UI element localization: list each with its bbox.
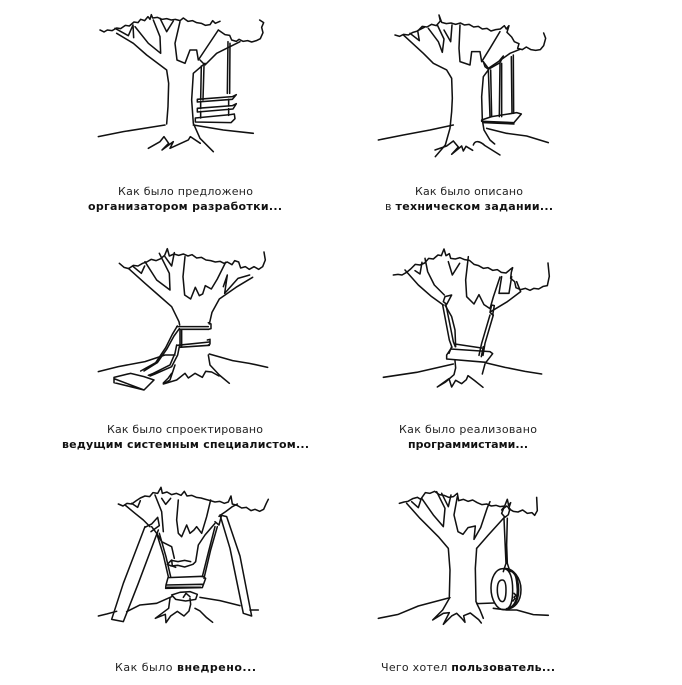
panel: implementation [98, 487, 268, 674]
caption: Чего хотел пользователь... [381, 661, 555, 674]
caption: Как было предложено [118, 185, 253, 198]
panel: specification [378, 15, 553, 213]
caption: Как было описано [415, 185, 523, 198]
caption bold: организатором разработки... [88, 200, 282, 213]
caption: Как было внедрено... [115, 661, 256, 674]
illustration: swing tied around trunk [98, 249, 268, 390]
illustration: swing seat wrapped around trunk [383, 249, 549, 387]
panel: user wanted [378, 491, 555, 674]
caption bold: в техническом задании... [385, 200, 553, 213]
caption bold: программистами... [408, 438, 528, 451]
illustration: swing with three seats [98, 15, 264, 152]
panel: organizer [88, 15, 282, 213]
panel: programmers [383, 249, 549, 451]
caption: Как было реализовано [399, 423, 537, 436]
illustration: swing with three ropes [378, 15, 548, 157]
caption: Как было спроектировано [107, 423, 263, 436]
illustration: A-frame swing with cut trunk [98, 487, 268, 623]
illustration: tire swing [378, 491, 548, 624]
panel: system designer [62, 249, 309, 451]
caption bold: ведущим системным специалистом... [62, 438, 309, 451]
